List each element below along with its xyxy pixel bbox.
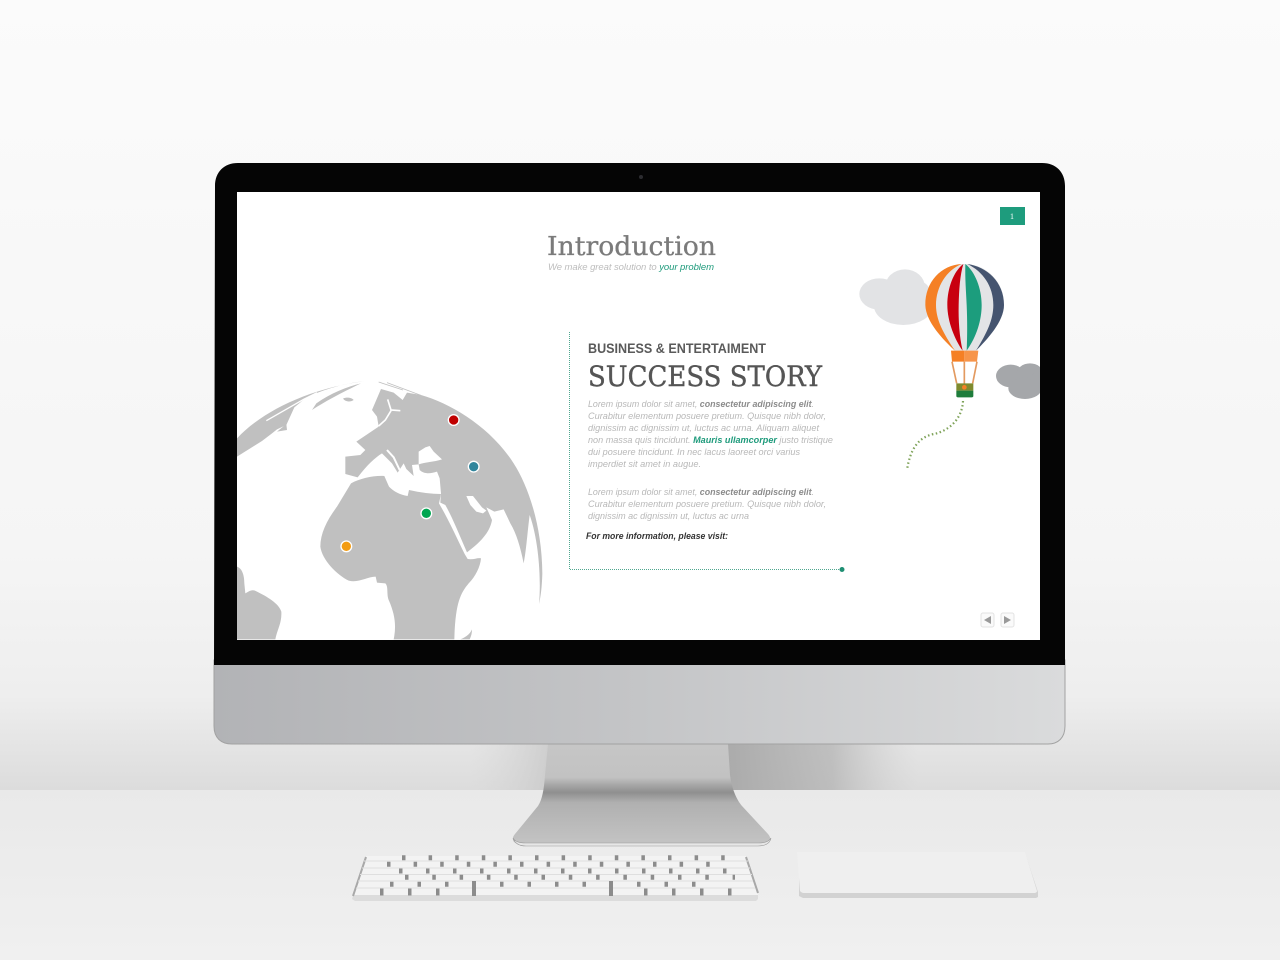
paragraph one: Curabitur elementum posuere pretium. Quisque nibh dolor,	[588, 411, 826, 422]
trackpad	[797, 852, 1038, 898]
stand shadow on wall, right	[728, 744, 918, 790]
keyboard side edges	[353, 857, 758, 896]
title: Introduction	[547, 232, 716, 262]
paragraph one: dui posuere tincidunt. In nec lacus laoreet orci varius	[588, 447, 800, 458]
subtitle: We make great solution to your problem	[548, 262, 714, 273]
paragraph one: dignissim ac dignissim ut, luctus ac urna. Aliquam aliquet	[588, 423, 819, 434]
more information line: For more information, please visit:	[586, 531, 728, 542]
paragraph two	[588, 487, 826, 522]
north america and greenland	[237, 381, 365, 457]
eyebrow heading: BUSINESS & ENTERTAIMENT	[588, 341, 767, 356]
paragraph one: Lorem ipsum dolor sit amet, consectetur adipiscing elit.	[588, 399, 814, 410]
adriatic	[387, 450, 400, 470]
main heading: SUCCESS STORY	[588, 360, 822, 393]
basket	[956, 383, 973, 391]
map pin: orange	[341, 541, 352, 552]
key rows	[356, 861, 755, 888]
persian gulf	[466, 496, 486, 513]
screen	[237, 192, 1040, 640]
dotted frame	[570, 332, 844, 572]
eurasia	[345, 389, 542, 604]
cloud: light	[859, 269, 933, 325]
arctic streaks	[379, 382, 421, 395]
black sea	[419, 446, 442, 464]
balloon dotted trail	[907, 401, 963, 470]
south america	[237, 567, 281, 639]
ropes	[952, 362, 977, 385]
navy stripe	[967, 264, 1004, 351]
balloon collar	[951, 351, 964, 362]
stand shadow on wall, left	[470, 744, 550, 790]
key gaps	[402, 855, 725, 860]
keyboard	[352, 856, 758, 901]
africa	[320, 476, 481, 639]
monitor	[214, 163, 1065, 744]
monitor stand	[513, 744, 771, 846]
hot air balloon	[925, 264, 1004, 397]
keyboard base strip	[352, 895, 758, 901]
paragraph two: Lorem ipsum dolor sit amet, consectetur adipiscing elit.	[588, 487, 814, 498]
green stripe	[965, 264, 982, 351]
keyboard body	[352, 856, 758, 901]
balloon envelope	[925, 264, 1004, 351]
orange stripe	[925, 264, 962, 351]
page number badge	[1000, 207, 1025, 225]
map pin: green	[421, 508, 432, 519]
map pin: blue	[468, 461, 479, 472]
paragraph two: Curabitur elementum posuere pretium. Quisque nibh dolor,	[588, 499, 826, 510]
madagascar	[460, 629, 472, 639]
previous button	[981, 613, 994, 627]
paragraph one: non massa quis tincidunt. Mauris ullamcorper justo tristique	[588, 435, 833, 446]
paragraph two: dignissim ac dignissim ut, luctus ac urna	[588, 511, 749, 522]
paragraph one	[588, 399, 833, 470]
monitor chin	[214, 660, 1065, 744]
baltic	[379, 399, 400, 426]
next button	[1001, 613, 1014, 627]
webcam	[639, 175, 643, 179]
cloud: dark	[996, 363, 1040, 399]
background: desk	[0, 790, 1280, 960]
paragraph one: imperdiet sit amet in augue.	[588, 459, 701, 470]
map pin: red	[448, 415, 459, 425]
monitor bezel	[214, 163, 1065, 665]
globe map	[237, 381, 542, 639]
page number badge: 1	[1010, 212, 1014, 221]
slide content	[237, 207, 1047, 639]
navigation buttons	[981, 613, 1014, 627]
red stripe	[947, 264, 963, 351]
